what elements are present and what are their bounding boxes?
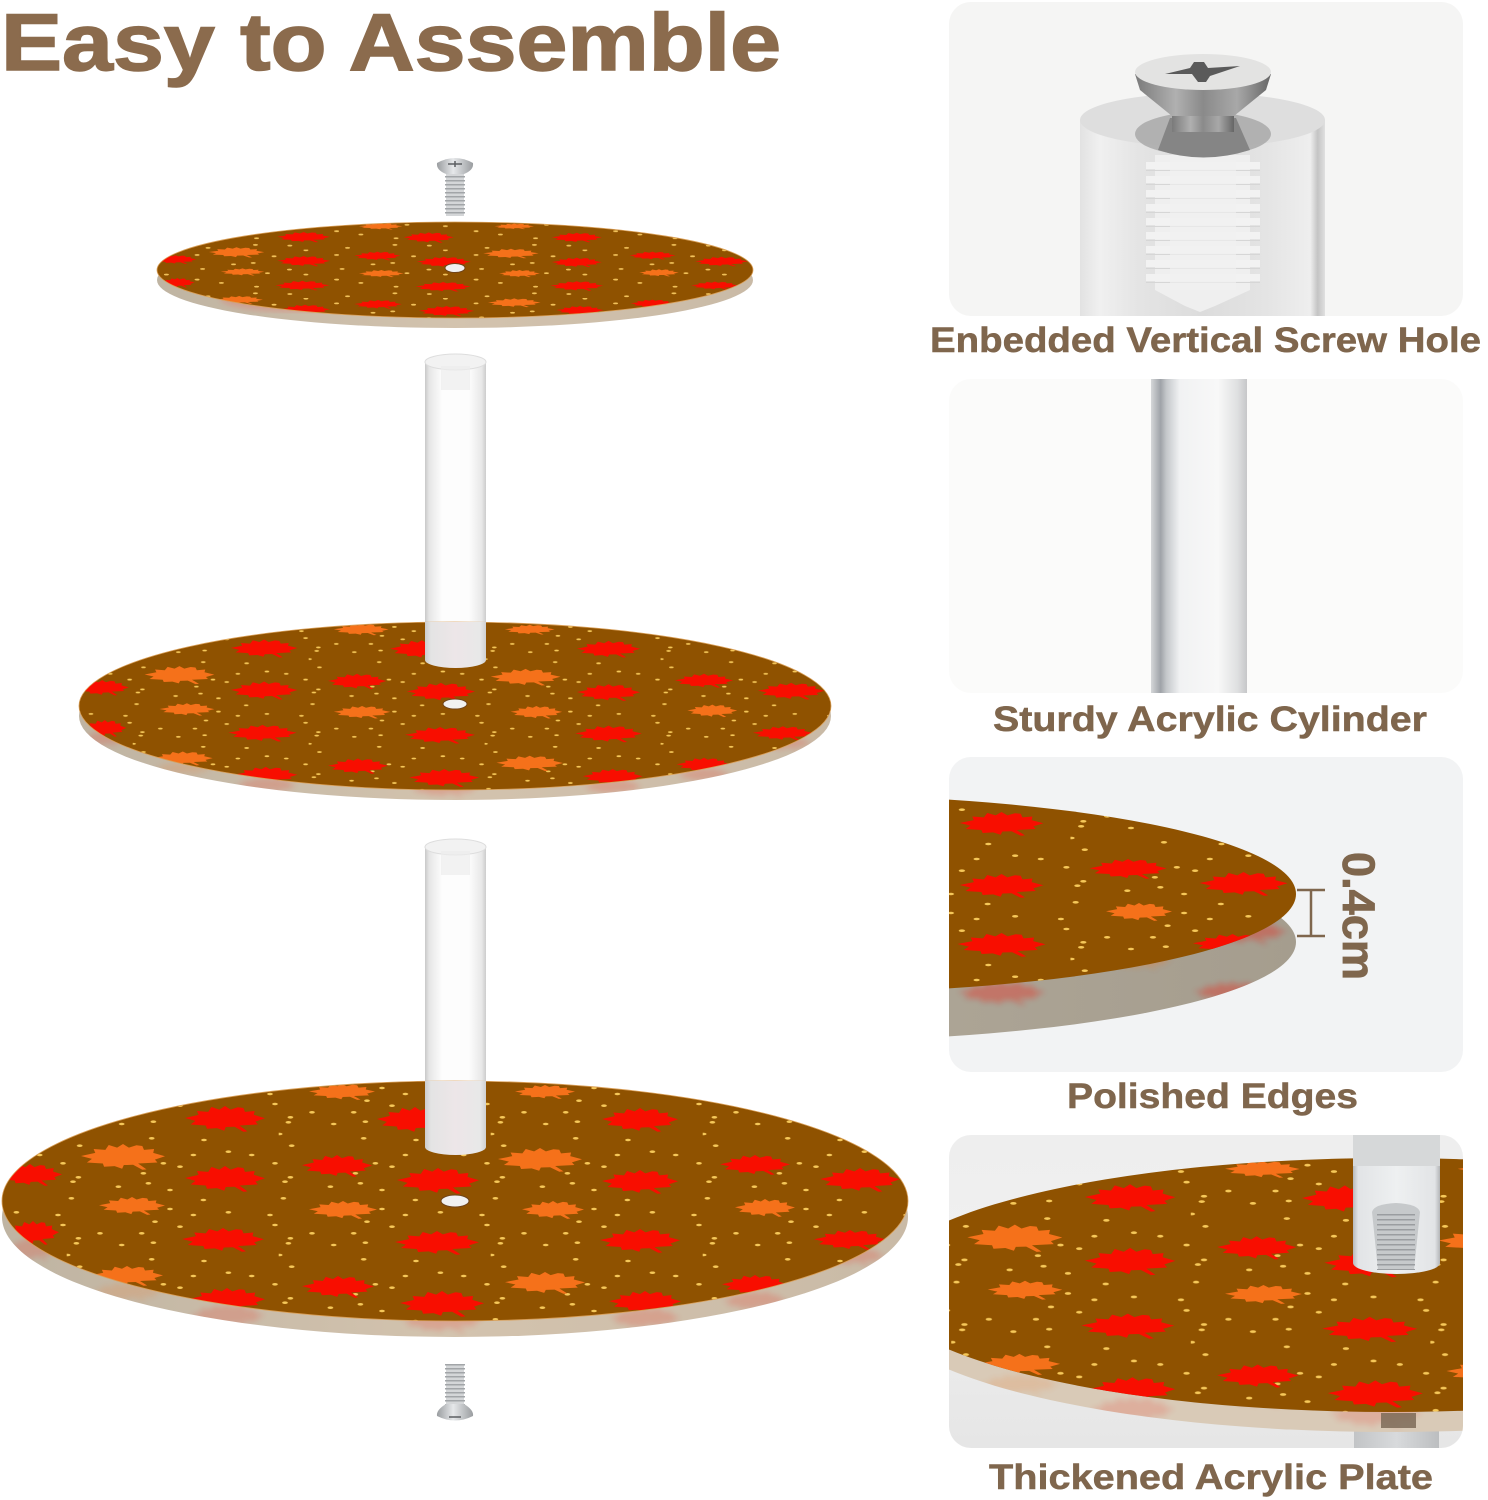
panel: embedded screw hole <box>949 2 1463 316</box>
plate edge <box>949 1350 1463 1432</box>
title: Easy to Assemble <box>1 0 781 88</box>
plate edge <box>949 918 1296 1036</box>
panel: polished edges <box>949 757 1463 1072</box>
panel: thickened plate <box>949 1135 1463 1448</box>
caption: cylinder: Sturdy Acrylic Cylinder <box>993 700 1427 739</box>
upper cylinder lower section <box>425 622 486 668</box>
rod below plate <box>1354 1431 1439 1448</box>
plate top <box>949 1158 1463 1412</box>
lower cylinder lower section <box>425 1081 486 1155</box>
thickness bracket <box>1297 890 1325 936</box>
plate hole <box>445 264 465 272</box>
middle plate <box>76 618 833 800</box>
screw head <box>1135 54 1271 158</box>
plate hole <box>443 699 467 709</box>
caption: screw hole: Enbedded Vertical Screw Hole <box>930 321 1481 360</box>
bottom plate <box>0 1075 910 1337</box>
caption: polished edges: Polished Edges <box>1067 1077 1358 1116</box>
screw thread in cylinder <box>1155 155 1250 312</box>
panel: acrylic cylinder <box>1151 379 1247 693</box>
top plate <box>154 220 754 328</box>
lower acrylic cylinder <box>425 839 486 1155</box>
plate top <box>949 800 1296 988</box>
top screw <box>437 158 473 216</box>
cylinder with screw <box>1353 1135 1440 1274</box>
plate hole <box>441 1195 469 1207</box>
cylinder body <box>1080 93 1325 316</box>
bottom screw <box>437 1364 473 1420</box>
caption: thickened plate: Thickened Acrylic Plate <box>989 1458 1433 1497</box>
thickness label: 0.4cm <box>1333 852 1384 980</box>
cylinder rod <box>1151 379 1247 693</box>
upper acrylic cylinder <box>425 354 486 668</box>
